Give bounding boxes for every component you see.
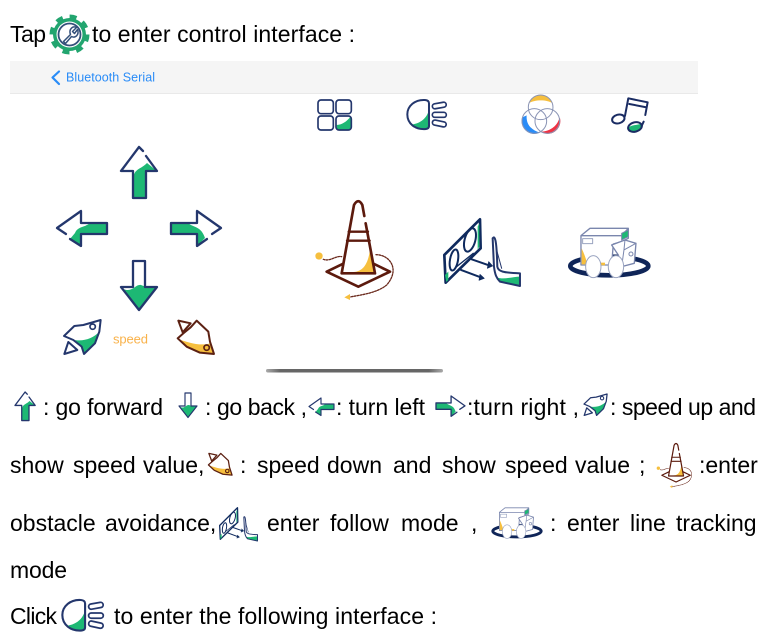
- legend line 2 text: speed: [505, 452, 568, 478]
- arrow: back: [121, 261, 157, 310]
- legend line 2 text: :: [240, 452, 246, 478]
- closing instruction: to enter the following interface :: [114, 603, 437, 629]
- small icon: left: [309, 398, 334, 416]
- small icon: cone: [657, 444, 692, 488]
- legend line 3 text: line: [630, 510, 666, 536]
- icon: lamp tab: [407, 100, 447, 129]
- legend line 2 text: value,: [143, 452, 204, 478]
- legend line 3 text: enter: [567, 510, 620, 536]
- small icon: robot: [493, 508, 541, 538]
- small icon: forward: [15, 392, 35, 421]
- arrow: right: [171, 211, 221, 246]
- small icon: follow: [220, 508, 257, 541]
- legend line 2 text: :enter: [699, 452, 758, 478]
- icon: music tab: [611, 98, 648, 133]
- legend line 3 text: ,: [471, 510, 477, 536]
- legend line 2 text: speed: [257, 452, 320, 478]
- icon: colour circles tab: [522, 95, 560, 134]
- legend line 2 text: show: [442, 452, 496, 478]
- arrow: forward: [121, 147, 157, 198]
- home indicator: [266, 369, 443, 372]
- icon: line tracking robot: [570, 228, 648, 278]
- legend line 2 text: ;: [639, 452, 645, 478]
- legend line 1 text: : speed up and: [610, 394, 756, 420]
- back label: Bluetooth Serial: [66, 70, 155, 84]
- arrow: left: [57, 211, 107, 246]
- speed label: speed: [113, 332, 148, 346]
- legend line 3 text: follow: [330, 510, 389, 536]
- legend line 2 text: value: [575, 452, 630, 478]
- navigation bar: [10, 61, 698, 94]
- icon: follow mode hand: [444, 219, 520, 286]
- legend line 3 text: :: [550, 510, 556, 536]
- legend line 1 text: : go forward: [43, 394, 163, 420]
- legend line 3 text: obstacle: [10, 510, 96, 536]
- small icon: back: [179, 393, 197, 418]
- small icon: right: [436, 396, 465, 416]
- icon: gear settings: [52, 17, 87, 52]
- legend line 1 text: :turn right ,: [467, 394, 579, 420]
- closing instruction: Click: [10, 603, 58, 629]
- legend line 1 text: : turn left: [336, 394, 426, 420]
- legend line 2 text: show: [10, 452, 64, 478]
- legend line 1 text: [43, 394, 756, 420]
- legend line 2 text: and: [393, 452, 431, 478]
- small icon: speed down: [208, 453, 232, 475]
- small icon: lamp: [62, 600, 104, 631]
- legend line 2 text: speed: [73, 452, 136, 478]
- legend line 2 text: down: [327, 452, 382, 478]
- legend line 3 text: mode: [401, 510, 459, 536]
- legend line 3 text: avoidance,: [105, 510, 216, 536]
- legend line 4 text: mode: [10, 557, 67, 583]
- icon: back chevron: [52, 72, 59, 84]
- icon: speed down rocket: [178, 321, 214, 354]
- heading: tap gear: to enter control interface :: [92, 21, 355, 47]
- icon: grid mode tab: [318, 100, 351, 130]
- icon: obstacle cone: [315, 201, 393, 300]
- legend line 1 text: : go back ,: [205, 394, 307, 420]
- legend line 3 text: tracking: [676, 510, 757, 536]
- small icon: speed up: [584, 394, 607, 415]
- legend line 3 text: enter: [267, 510, 320, 536]
- icon: speed up rocket: [64, 320, 101, 354]
- heading: tap gear: Tap: [10, 21, 46, 47]
